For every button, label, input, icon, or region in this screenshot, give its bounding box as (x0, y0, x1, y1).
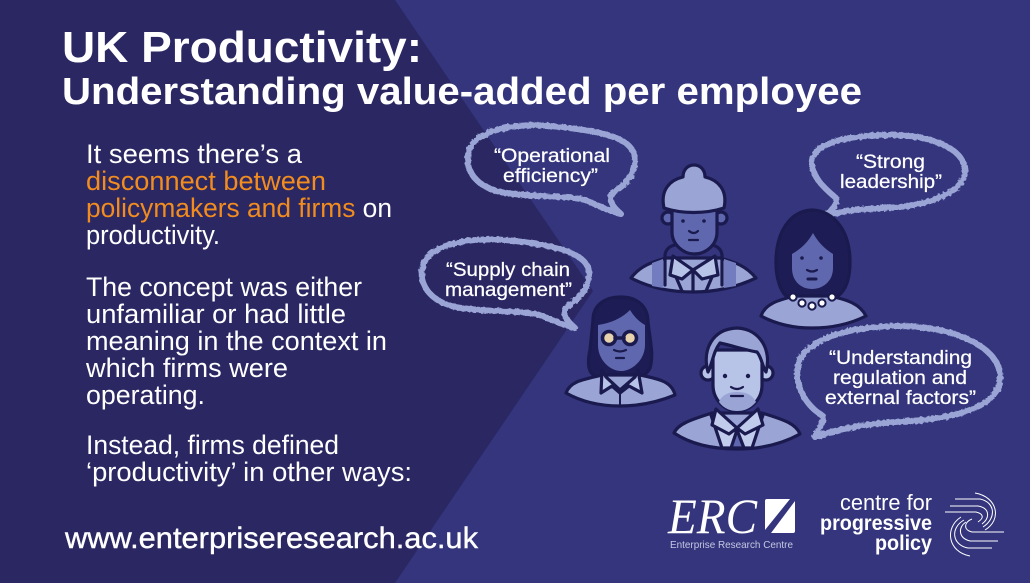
intro text block: disconnect between (86, 166, 326, 196)
speech bubble: supply chain management (422, 239, 589, 328)
logo: Enterprise Research Centre (667, 488, 795, 551)
speech bubble: supply chain management: management” (445, 279, 572, 301)
concept text block (85, 272, 387, 410)
speech bubble: understanding regulation and external factors: regulation and (833, 367, 967, 389)
dark chevron background panel (0, 0, 593, 583)
title (62, 23, 862, 113)
title: Understanding value-added per employee (62, 71, 862, 113)
website url: www.enterpriseresearch.ac.uk (64, 522, 479, 555)
concept text block: operating. (86, 380, 205, 410)
speech bubble: strong leadership (812, 135, 965, 216)
logo: centre for progressive policy: progressive (820, 511, 932, 535)
closing text block: Instead, firms defined (86, 430, 339, 460)
logo: Enterprise Research Centre: ERC (667, 488, 758, 544)
speech bubble: strong leadership: leadership” (840, 171, 942, 193)
logo: centre for progressive policy: policy (875, 531, 932, 555)
intro text block (86, 139, 392, 250)
concept text block: unfamiliar or had little (86, 299, 346, 329)
concept text block: The concept was either (86, 272, 362, 302)
speech bubble: understanding regulation and external factors: external factors” (825, 387, 976, 409)
logo: centre for progressive policy: centre for (840, 490, 932, 515)
title: UK Productivity: (62, 23, 422, 72)
intro text block: productivity. (86, 220, 220, 250)
speech bubble: operational efficiency: “Operational (494, 145, 610, 167)
person: man in suit (674, 328, 800, 449)
person: woman with necklace (761, 210, 866, 328)
closing text block (86, 430, 412, 487)
logo: Enterprise Research Centre: Enterprise Research Centre (670, 539, 793, 551)
speech bubble: operational efficiency: efficiency” (503, 165, 598, 187)
speech bubble: strong leadership: “Strong (856, 151, 925, 173)
concept text block: which firms were (85, 353, 288, 383)
intro text block: It seems there’s a (86, 139, 302, 169)
closing text block: ‘productivity’ in other ways: (86, 457, 412, 487)
concept text block: meaning in the context in (86, 326, 387, 356)
speech bubble: operational efficiency (468, 125, 635, 214)
person: woman with glasses (566, 297, 675, 406)
intro text block: policymakers and firms on (86, 193, 392, 223)
person: construction worker (631, 165, 756, 292)
logo: centre for progressive policy (820, 490, 1004, 556)
speech bubble: supply chain management: “Supply chain (446, 259, 570, 281)
speech bubble: understanding regulation and external factors (797, 326, 1000, 437)
speech bubble: understanding regulation and external factors: “Understanding (829, 347, 972, 369)
